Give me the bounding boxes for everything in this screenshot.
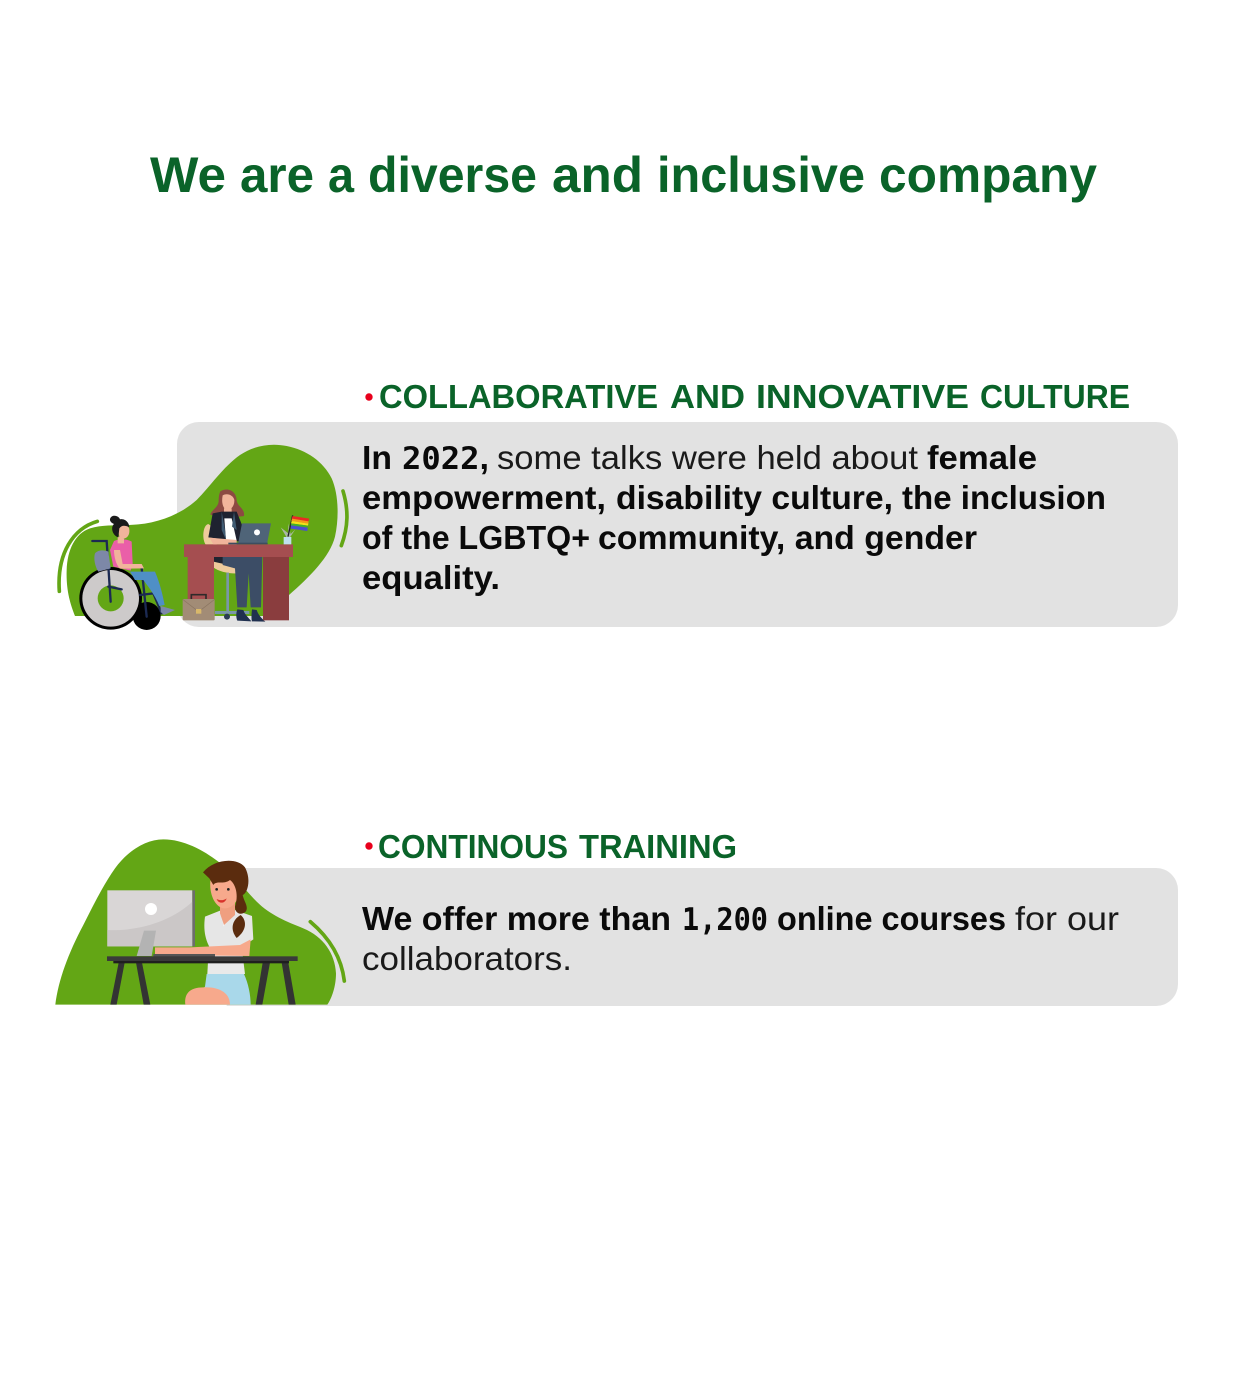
title: company [879, 147, 1097, 203]
plant and pride flag [281, 515, 309, 544]
body text: training: collaborators. [362, 940, 572, 977]
body text: training: online courses [777, 900, 1006, 937]
laptop [228, 523, 271, 544]
woman at desk [208, 490, 244, 544]
heading: training [378, 829, 737, 866]
briefcase [183, 595, 215, 620]
chair and desk woman legs [203, 524, 265, 622]
body text: culture: female [927, 439, 1037, 476]
body text: training [362, 900, 1119, 977]
body text: training: 1,200 [682, 902, 768, 938]
heading: training: CONTINOUS [378, 829, 568, 866]
body text: culture: 2022, [402, 439, 489, 477]
motion arc [310, 922, 344, 981]
card background: culture [177, 422, 1178, 627]
heading: culture: INNOVATIVE [756, 379, 969, 416]
panel: collaborative and innovative culture [59, 379, 1178, 630]
woman in wheelchair [110, 516, 175, 615]
green blob [55, 839, 336, 1005]
body text: training: for our [1015, 900, 1119, 937]
title: diverse [368, 147, 537, 203]
heading: culture: AND [670, 379, 745, 416]
title: inclusive [657, 147, 865, 203]
illustration: wheelchair user and woman at desk [59, 445, 347, 630]
desk [107, 954, 298, 1005]
bullet: culture heading [365, 393, 373, 401]
body text: culture: disability culture, [616, 479, 893, 516]
title: We [150, 147, 226, 203]
panel: continous training [40, 829, 1178, 1007]
bullet: training heading [365, 842, 373, 850]
heading: training: TRAINING [579, 829, 737, 866]
heading: culture: COLLABORATIVE [379, 379, 658, 416]
illustration: woman at computer [40, 839, 344, 1007]
body text: culture: equality. [362, 559, 500, 596]
body text: training: We offer more than [362, 900, 671, 937]
heading: culture [379, 379, 1130, 416]
body text: culture: some talks were held about [497, 439, 918, 476]
heading: culture: CULTURE [980, 379, 1130, 416]
title: are [240, 147, 314, 203]
body text: culture [362, 439, 1106, 596]
body text: culture: the inclusion [902, 479, 1106, 516]
motion arcs [59, 491, 347, 591]
woman at computer [155, 861, 253, 1005]
body text: culture: of the LGBTQ+ [362, 519, 590, 556]
title [150, 147, 1097, 203]
wheelchair [79, 541, 162, 630]
body text: culture: empowerment, [362, 479, 606, 516]
card background: training [177, 868, 1178, 1006]
title: a [328, 147, 355, 203]
desk [184, 544, 293, 620]
monitor [107, 890, 195, 956]
body text: culture: community, and gender [598, 519, 977, 556]
body text: culture: In [362, 439, 392, 476]
green blob [67, 445, 338, 616]
cover for card's left edge [40, 867, 227, 1007]
title: and [552, 147, 643, 203]
